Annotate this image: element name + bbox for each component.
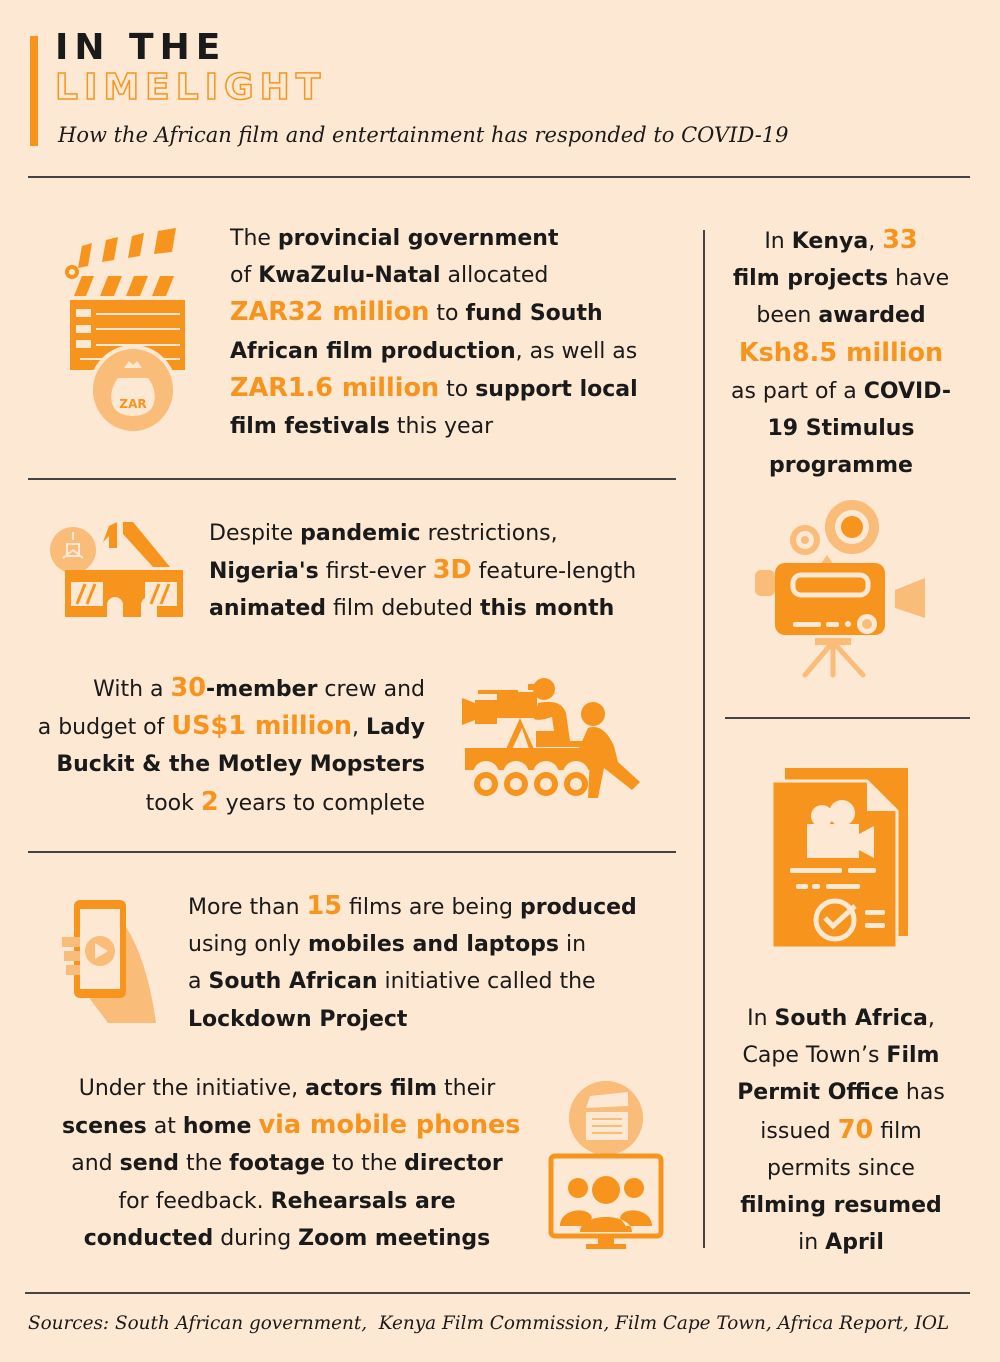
text: Nigeria 3D film: Despite pandemic restrictions, <box>209 521 558 546</box>
icon: clapperboard with money bag <box>65 228 185 431</box>
text: Kenya stimulus: film projects have <box>733 266 949 291</box>
sources: Sources: South African government, Kenya Film Commission, Film Cape Town, Africa Report, IOL <box>28 1313 949 1334</box>
subtitle: How the African film and entertainment has responded to COVID-19 <box>58 123 789 147</box>
title <box>55 27 321 100</box>
text: Lockdown Project: a South African initiative called the <box>188 969 596 994</box>
text: KwaZulu-Natal funding <box>230 226 638 439</box>
text: Lady Buckit crew: a budget of US$1 million, Lady <box>38 711 425 741</box>
icon: camera dolly crew <box>462 678 640 798</box>
text: Cape Town permits: filming resumed <box>740 1193 942 1218</box>
text: Cape Town permits: permits since <box>767 1156 915 1181</box>
text: KwaZulu-Natal funding: of KwaZulu-Natal allocated <box>230 263 548 288</box>
text: Kenya stimulus: 19 Stimulus <box>767 416 915 441</box>
text: Nigeria 3D film: Nigeria's first-ever 3D feature-length <box>209 555 636 585</box>
text: Kenya stimulus <box>731 225 951 478</box>
title: IN THE <box>55 27 226 68</box>
text: Kenya stimulus: programme <box>769 453 913 478</box>
text: Lady Buckit crew: With a 30-member crew and <box>93 673 425 703</box>
icon: 3D glasses <box>50 522 183 617</box>
text: Nigeria 3D film <box>209 521 636 621</box>
text: Lockdown Project <box>188 891 637 1032</box>
text: Cape Town permits <box>737 1006 945 1255</box>
icon: monitor video meeting <box>548 1081 664 1249</box>
text: Kenya stimulus: been awarded <box>756 303 926 328</box>
text: KwaZulu-Natal funding: African film production, as well as <box>230 339 637 364</box>
text: Cape Town permits: in April <box>798 1230 884 1255</box>
text: actors at home: scenes at home via mobile phones <box>62 1110 520 1140</box>
text: Cape Town permits: issued 70 film <box>760 1115 922 1145</box>
icon: film camera on tripod <box>755 500 925 678</box>
text: actors at home: conducted during Zoom meetings <box>84 1226 490 1251</box>
icon: smartphone in hand <box>62 900 156 1023</box>
text: Lockdown Project: Lockdown Project <box>188 1007 407 1032</box>
text: Cape Town permits: Cape Town’s Film <box>743 1043 939 1068</box>
text: Lady Buckit crew: took 2 years to complete <box>146 787 425 817</box>
icon: clapperboard with money bag: ZAR <box>119 397 147 411</box>
text: actors at home: Under the initiative, actors film their <box>79 1076 495 1101</box>
text: Kenya stimulus: as part of a COVID- <box>731 379 951 404</box>
text: Lockdown Project: More than 15 films are being produced <box>188 891 637 921</box>
text: Lady Buckit crew <box>38 673 425 817</box>
text: Lockdown Project: using only mobiles and laptops in <box>188 932 586 957</box>
text: Cape Town permits: In South Africa, <box>747 1006 935 1031</box>
text: Nigeria 3D film: animated film debuted this month <box>209 596 614 621</box>
icon: film permit document <box>774 768 908 946</box>
text: Kenya stimulus: Ksh8.5 million <box>739 338 943 368</box>
title bar accent <box>30 36 38 146</box>
text: Lady Buckit crew: Buckit & the Motley Mopsters <box>56 752 425 777</box>
text: actors at home <box>62 1076 520 1251</box>
text: Kenya stimulus: In Kenya, 33 <box>764 225 918 255</box>
text: actors at home: for feedback. Rehearsals are <box>118 1189 456 1214</box>
text: KwaZulu-Natal funding: ZAR1.6 million to support local <box>230 373 638 403</box>
text: KwaZulu-Natal funding: film festivals this year <box>230 414 493 439</box>
text: Cape Town permits: Permit Office has <box>737 1080 945 1105</box>
text: KwaZulu-Natal funding: ZAR32 million to fund South <box>230 297 603 327</box>
text: KwaZulu-Natal funding: The provincial government <box>230 226 558 251</box>
text: actors at home: and send the footage to the director <box>71 1151 503 1176</box>
